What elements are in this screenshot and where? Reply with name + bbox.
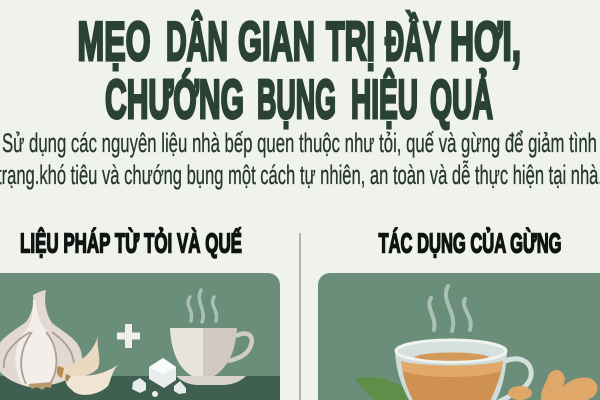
icon: tea cup xyxy=(395,340,531,400)
icon: coffee cup and saucer xyxy=(170,328,252,385)
icon: garlic clove lower xyxy=(65,362,122,395)
icon: steam over tea xyxy=(429,286,471,331)
column divider xyxy=(299,233,301,400)
title: BỤNG xyxy=(257,68,336,130)
icon: sugar cubes xyxy=(132,358,186,397)
title: MẸO xyxy=(78,10,150,72)
icon: ginger root xyxy=(508,370,597,400)
title: DÂN xyxy=(166,10,228,72)
title xyxy=(78,10,521,130)
title: ĐẦY xyxy=(385,10,441,72)
icon: green leaf xyxy=(355,377,410,400)
title: GIAN xyxy=(238,10,315,72)
heading: garlic and cinnamon remedy: LIỆU PHÁP TỪ TỎI VÀ QUẾ xyxy=(20,226,242,258)
title: CHƯỚNG xyxy=(105,68,244,130)
icon: garlic clove upper xyxy=(56,336,99,379)
title: TRỊ xyxy=(326,10,375,72)
icon: steam over cup xyxy=(188,290,217,322)
title: QUẢ xyxy=(430,68,493,130)
icon: garlic bulb xyxy=(0,290,82,390)
icon: plus sign xyxy=(117,324,140,348)
panel: ginger tea illustration xyxy=(318,273,600,400)
panel: garlic and cinnamon illustration xyxy=(0,273,280,400)
title: HƠI, xyxy=(450,10,521,72)
intro text xyxy=(0,128,600,190)
title: HIỆU xyxy=(351,68,418,130)
